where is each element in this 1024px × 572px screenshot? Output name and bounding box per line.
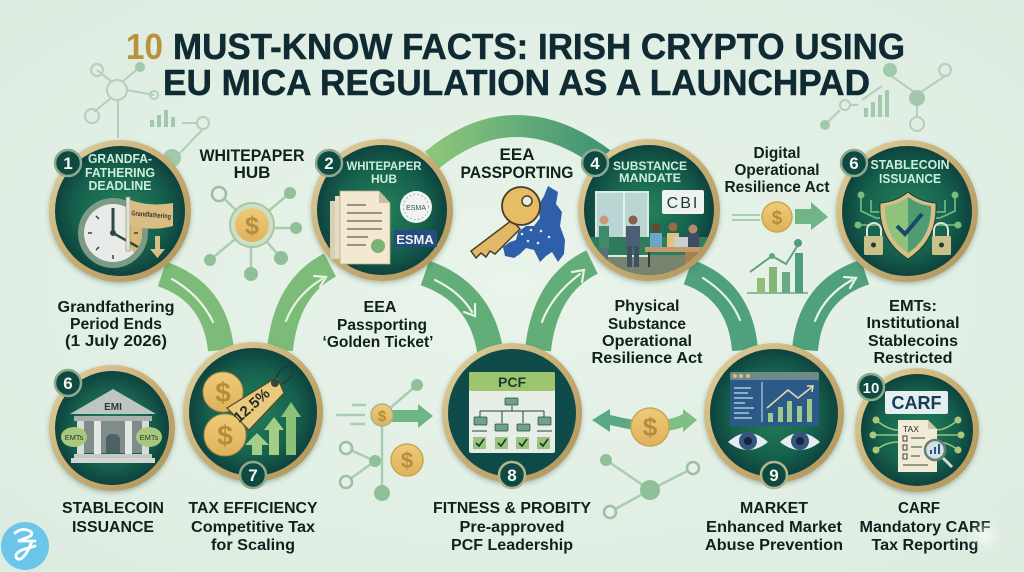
caption: physical substance [592,298,703,367]
heading: stablecoin issuance: STABLECOIN [870,158,950,172]
caption: fitness and probity [433,500,591,554]
caption: grandfathering period: (1 July 2026) [65,333,167,350]
text: DORA heading [724,145,830,196]
badge: number 6 [841,150,867,176]
icon: flag with deadline arrow [126,197,173,258]
panel: left network and coins: $ [378,408,387,425]
caption: EMTs institutional stablecoins: Institutional [866,315,960,332]
panel: circle 7 tax efficiency [183,342,323,488]
icon: PCF org chart board [469,372,555,453]
caption: market abuse prevention: Abuse Prevention [705,537,843,554]
illustration: office scene [590,191,708,275]
icon: coins: $ [215,377,231,408]
caption: grandfathering period [58,299,174,350]
heading: grandfathering deadline: FATHERING [85,165,155,180]
decorative network: top right [820,63,951,131]
heading: whitepaper hub [200,146,304,182]
badge: number 4 [582,150,608,176]
icon: whitepaper documents [330,191,390,264]
icon: 12.5 percent tax tag: 12.5% [230,385,273,426]
icon: EMI bank building: EMI [104,402,122,413]
heading: grandfathering deadline [85,151,155,193]
caption: fitness and probity: FITNESS & PROBITY [433,500,591,517]
icon: circuits [854,192,962,228]
heading: grandfathering deadline: GRANDFA- [88,151,152,166]
caption: CARF tax reporting: Tax Reporting [872,537,978,554]
caption: physical substance: Physical [614,298,680,315]
label: CARF: CARF [892,393,942,413]
panel: circle 8 PCF [442,343,582,488]
icon: padlocks [864,223,951,255]
arrow: 9 to 6 [805,272,865,350]
heading: stablecoin issuance [870,158,950,186]
heading: substance mandate: MANDATE [619,171,681,185]
heading: substance mandate: SUBSTANCE [613,159,687,173]
icon: growth arrows [245,402,301,455]
caption: physical substance: Operational [602,333,692,350]
panel: left network and coins [336,379,433,501]
caption: market abuse prevention: Enhanced Market [706,519,843,536]
caption: physical substance: Substance [608,316,686,333]
caption: tax efficiency: TAX EFFICIENCY [188,500,318,517]
heading: grandfathering deadline: DEADLINE [88,178,152,193]
watermark glare [975,525,995,545]
icon: coins: $ [217,420,233,451]
panel: left network and coins: $ [401,448,413,473]
panel: whitepaper hub network: $ [245,212,259,240]
heading: whitepaper hub: WHITEPAPER [346,159,422,173]
arrow: 7 to 2 [280,265,330,350]
icon: watching eyes [728,432,820,450]
logo: bottom-left brand mark [1,522,49,570]
text: DORA heading: Resilience Act [724,179,830,196]
arrow: 2 to 4 top arc [432,126,605,160]
caption: CARF tax reporting: Mandatory CARF [860,519,991,536]
badge: number 9 [761,462,787,488]
caption: tax efficiency: for Scaling [211,537,295,554]
badge: number 1: 1 [63,154,73,173]
caption: physical substance: Resilience Act [592,350,703,367]
icon: flag with deadline arrow: Grandfathering [131,210,171,221]
decorative network: top left [85,62,209,167]
heading: EEA passporting [460,145,574,182]
text: DORA heading: Digital [754,145,800,162]
heading: whitepaper hub: HUB [234,163,270,182]
panel: circle 6 stablecoin issuance [836,140,978,282]
caption: stablecoin issuance [62,500,164,536]
caption: EMTs institutional stablecoins [866,298,960,367]
panel: digital operational resilience act [724,145,830,293]
panel: circle 9 market abuse [704,343,844,488]
badge: number 7 [240,462,266,488]
caption: tax efficiency [188,500,318,554]
badge: number 6: 6 [849,154,859,173]
arrow: 4 to 9 [688,272,745,350]
caption: EEA passporting golden ticket: Passporting [337,317,427,334]
caption: market abuse prevention [705,500,843,554]
badge: number 4: 4 [590,154,600,173]
badge: number 8 [499,462,525,488]
badge: number 2 [316,150,342,176]
badge: number 2: 2 [324,154,334,173]
heading: whitepaper hub [346,159,422,186]
badge: number 7: 7 [248,466,258,485]
icon: shield with check [880,192,936,259]
icon: 12.5 percent tax tag [227,366,293,430]
caption: EEA passporting golden ticket: ‘Golden Ticket’ [322,334,434,351]
caption: EEA passporting golden ticket: EEA [364,299,397,316]
heading: EEA passporting: PASSPORTING [460,163,574,182]
panel: whitepaper hub network [200,146,304,281]
arrow: 1 to 7 [162,274,221,350]
caption: CARF tax reporting [860,500,991,554]
icon: market surveillance screen [730,372,819,426]
icon: PCF org chart board: PCF [498,374,526,390]
icon: ESMA seal [400,191,432,223]
heading: whitepaper hub: WHITEPAPER [200,146,304,165]
icon: circuits [870,416,964,454]
caption: stablecoin issuance: STABLECOIN [62,500,164,517]
title: 10 [126,26,163,67]
panel: right network and coin [592,408,699,518]
caption: EEA passporting golden ticket [322,299,434,351]
caption: EMTs institutional stablecoins: EMTs: [889,298,937,315]
caption: fitness and probity: PCF Leadership [451,537,573,554]
icon: map of Europe [503,186,565,262]
badge: number 8: 8 [507,466,517,485]
badge: number 10: 10 [863,380,879,397]
caption: EMTs institutional stablecoins: Stablecoins [868,333,958,350]
caption: grandfathering period: Period Ends [70,316,162,333]
panel: EEA passporting [460,145,574,262]
caption: fitness and probity: Pre-approved [460,519,564,536]
caption: EMTs institutional stablecoins: Restricted [874,350,952,367]
sign: CBI: CBI [667,195,699,212]
caption: stablecoin issuance: ISSUANCE [72,519,154,536]
icon: clock [78,198,148,268]
label: EMTs left: EMTs [65,433,84,442]
label: EMTs right: EMTs [140,433,159,442]
panel: circle 4 substance mandate [578,139,720,285]
panel: circle 10 CARF [855,368,979,492]
icon: tax document with magnifier: TAX [903,424,919,434]
title [126,26,905,103]
heading: substance mandate [613,159,687,185]
heading: EEA passporting: EEA [500,145,534,164]
arrow: 2 to 8 [425,273,490,350]
icon: golden key [471,187,540,258]
caption: grandfathering period: Grandfathering [58,299,174,316]
panel: circle 1 grandfathering deadline [49,140,191,282]
icon: ESMA label: ESMA [396,232,434,247]
caption: tax efficiency: Competitive Tax [191,519,315,536]
heading: whitepaper hub: HUB [371,172,397,186]
icon: ESMA seal: ESMA [406,205,426,212]
panel: circle 6 EMI stablecoin [49,365,175,491]
text: DORA heading: Operational [734,162,820,179]
badge: number 9: 9 [769,466,779,485]
icon: growth chart [747,239,808,293]
panel: circle 2 whitepaper hub [311,139,453,281]
panel: digital operational resilience act: $ [772,208,783,229]
caption: market abuse prevention: MARKET [740,500,808,517]
badge: number 1 [55,150,81,176]
heading: stablecoin issuance: ISSUANCE [879,172,941,186]
sign: CBI [662,190,704,214]
icon: coins [203,372,246,456]
arrow: 8 to 4 [538,262,592,350]
caption: CARF tax reporting: CARF [898,500,940,517]
panel: right network and coin: $ [643,412,658,442]
title: MUST-KNOW FACTS: IRISH CRYPTO USING [173,26,905,67]
badge: number 6: 6 [63,374,73,393]
title: EU MICA REGULATION AS A LAUNCHPAD [163,62,870,103]
